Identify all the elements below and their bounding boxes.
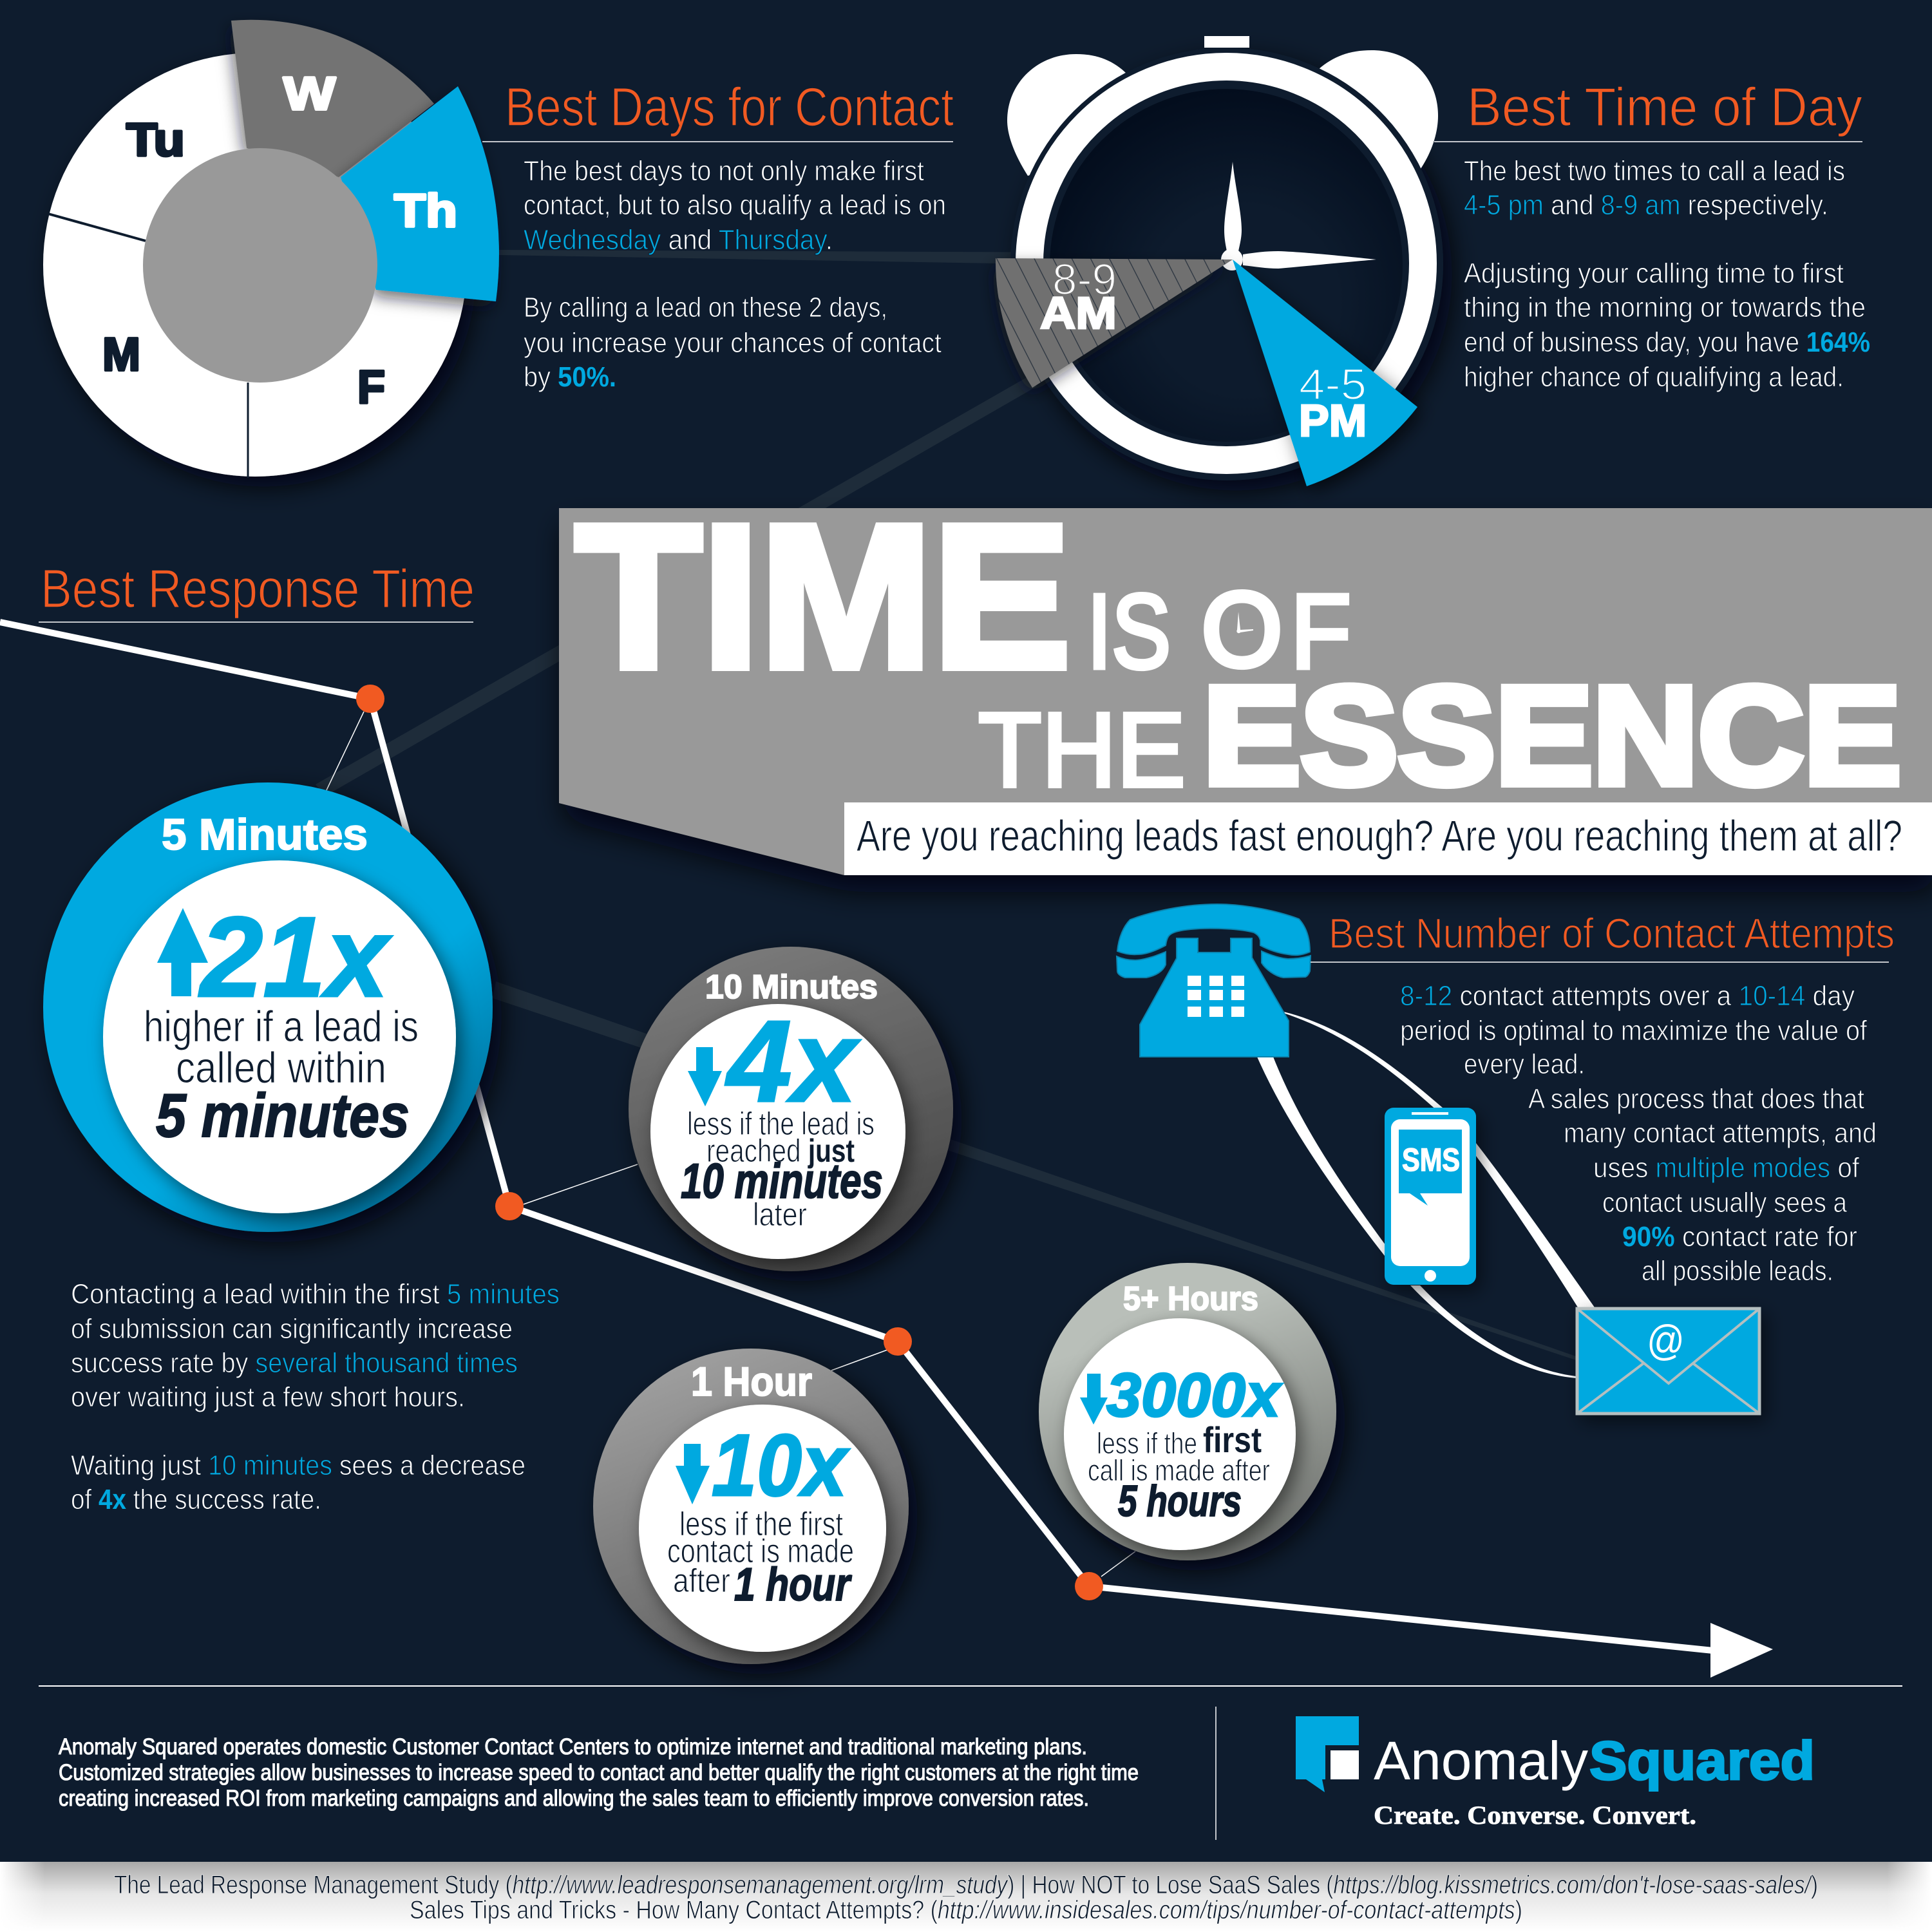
caption xyxy=(667,1506,854,1611)
icon: email envelope xyxy=(1577,1309,1759,1414)
wedge: Wednesday xyxy=(231,20,434,177)
text: response time body: of 4x the success rate. xyxy=(71,1484,321,1515)
stat: 3000x: 3000x xyxy=(1106,1361,1283,1430)
caption xyxy=(681,1106,883,1233)
PM label xyxy=(1299,360,1367,446)
stat: 21x: 21x xyxy=(198,893,392,1021)
clock hands xyxy=(1221,162,1376,270)
text: best time body: Adjusting your calling time to first xyxy=(1464,258,1844,289)
label: 1 Hour: 1 Hour xyxy=(691,1359,812,1405)
heading: best time of day: Best Time of Day xyxy=(1467,77,1862,137)
caption: higher if a lead is xyxy=(144,1002,419,1051)
caption: 5 minutes xyxy=(156,1081,410,1150)
caption: 5 hours xyxy=(1118,1477,1242,1526)
heading: best response time: Best Response Time xyxy=(41,558,475,619)
heading: best days for contact: Best Days for Contact xyxy=(505,77,954,137)
text: best days body: contact, but to also qualify a lead is on xyxy=(524,189,946,221)
sources text: The Lead Response Management Study (http://www.leadresponsemanagement.org/lrm_study) | How NOT to Lose SaaS Sales (https://blog.kissmetrics.com/don't-lose-saas-sales/) xyxy=(114,1871,1818,1899)
sources text xyxy=(114,1871,1818,1924)
caption: less if the first xyxy=(679,1506,843,1543)
label: 5+ Hours: 5+ Hours xyxy=(1123,1280,1258,1318)
day labels: Tu xyxy=(126,115,185,166)
logo tagline: Create. Converse. Convert. xyxy=(1374,1801,1696,1830)
connector thin lines xyxy=(327,712,1135,1577)
logo: Anomaly Squared xyxy=(1296,1716,1815,1830)
wedge: Thursday xyxy=(341,86,499,301)
icon: right bell xyxy=(1288,50,1438,169)
text: best time body xyxy=(1464,155,1870,393)
caption xyxy=(144,1002,419,1150)
text: contact attempts body: uses multiple modes of xyxy=(1593,1152,1860,1184)
icon: up arrow xyxy=(157,908,208,996)
caption: 1 hour xyxy=(734,1559,852,1611)
caption: reached just xyxy=(706,1133,855,1169)
caption: first xyxy=(1203,1419,1262,1460)
title: IS OF: O xyxy=(1202,571,1282,688)
text: contact attempts body: every lead. xyxy=(1464,1048,1585,1080)
text: best days body: By calling a lead on these 2 days, xyxy=(524,292,887,323)
text: contact attempts body: A sales process that does that xyxy=(1528,1083,1864,1115)
text: best time body: end of business day, you have 164% xyxy=(1464,327,1870,358)
caption: call is made after xyxy=(1088,1454,1270,1487)
icon: clock top button xyxy=(1204,36,1249,48)
title: TIME: TIME xyxy=(575,482,1071,711)
PM label: PM xyxy=(1299,395,1367,446)
AM label: AM xyxy=(1040,288,1117,338)
subtitle strip xyxy=(844,802,1932,875)
text: company description: creating increased ROI from marketing campaigns and allowing the sales team to efficiently improve conversion rates. xyxy=(59,1786,1089,1811)
text: company description: Customized strategies allow businesses to increase speed to contact and better qualify the right customers at the right time xyxy=(59,1760,1139,1785)
icon: email envelope: @ xyxy=(1647,1316,1685,1364)
caption: contact is made xyxy=(667,1533,854,1570)
day labels xyxy=(102,68,457,413)
text: contact attempts body: contact usually sees a xyxy=(1602,1187,1847,1218)
icon: left bell xyxy=(1007,54,1159,176)
sources text: Sales Tips and Tricks - How Many Contact Attempts? (http://www.insidesales.com/tips/number-of-contact-attempts) xyxy=(410,1896,1522,1924)
text: contact attempts body: many contact attempts, and xyxy=(1564,1117,1877,1149)
caption: less if the lead is xyxy=(687,1106,875,1142)
title: IS OF: IS xyxy=(1087,573,1171,690)
logo: Anomaly Squared: Squared xyxy=(1589,1730,1815,1791)
title: THE: THE xyxy=(978,691,1186,809)
text: best days body: Wednesday and Thursday. xyxy=(524,224,833,256)
wedge: 8-9 AM xyxy=(996,258,1233,388)
text: company description: Anomaly Squared operates domestic Customer Contact Centers to optimize internet and traditional marketing plans. xyxy=(59,1734,1087,1759)
text: best days body: by 50%. xyxy=(524,361,616,393)
stat: 10x: 10x xyxy=(712,1416,850,1514)
panel: alarm clock xyxy=(996,36,1443,486)
footer band xyxy=(0,1862,1932,1932)
caption: after xyxy=(673,1562,730,1600)
text: best days body: The best days to not only make first xyxy=(524,155,924,187)
text: contact attempts body: period is optimal to maximize the value of xyxy=(1400,1015,1868,1046)
faint background connector lines xyxy=(316,250,1576,1360)
title: IS OF: F xyxy=(1291,573,1351,690)
circle: 1 hour xyxy=(593,1349,909,1664)
label: 5 Minutes: 5 Minutes xyxy=(162,810,368,859)
panel: best days pie chart xyxy=(43,20,499,478)
text: contact attempts body: all possible leads. xyxy=(1642,1255,1833,1287)
AM label xyxy=(1040,255,1117,338)
text: company description xyxy=(59,1734,1139,1811)
footer vertical divider xyxy=(1215,1707,1217,1840)
text: response time body: success rate by several thousand times xyxy=(71,1347,518,1379)
caption: 10 minutes xyxy=(681,1154,883,1209)
clock face xyxy=(1050,89,1403,442)
caption xyxy=(1088,1419,1270,1526)
icon: down arrow xyxy=(688,1047,722,1106)
day labels: F xyxy=(357,362,385,413)
day labels: Th xyxy=(394,185,457,237)
text: best time body: 4-5 pm and 8-9 am respectively. xyxy=(1464,189,1828,221)
label: 10 Minutes: 10 Minutes xyxy=(705,969,878,1006)
text: best days body xyxy=(524,155,946,393)
text: response time body: over waiting just a few short hours. xyxy=(71,1381,465,1413)
text: contact attempts body xyxy=(1400,980,1877,1287)
circle: 5 minutes xyxy=(43,782,493,1232)
text: best time body: higher chance of qualifying a lead. xyxy=(1464,361,1844,393)
caption: later xyxy=(753,1197,807,1233)
trend line with arrow xyxy=(0,622,1773,1678)
centre disc xyxy=(143,148,377,383)
day labels: M xyxy=(102,329,140,381)
curved connectors: phone, smartphone, email xyxy=(1257,1012,1595,1378)
icon: smartphone with SMS bubble: SMS xyxy=(1402,1142,1460,1178)
text: contact attempts body: 8-12 contact attempts over a 10-14 day xyxy=(1400,980,1855,1012)
text: best time body: thing in the morning or towards the xyxy=(1464,292,1866,323)
text: response time body: Contacting a lead within the first 5 minutes xyxy=(71,1278,560,1310)
text: best days body: you increase your chances of contact xyxy=(524,327,942,359)
caption: called within xyxy=(176,1043,386,1092)
icon: down arrow xyxy=(1080,1374,1108,1425)
icon: down arrow xyxy=(676,1444,710,1504)
orange timeline dots xyxy=(356,685,1103,1600)
logo: Anomaly Squared: Anomaly xyxy=(1374,1730,1588,1791)
title: ESSENCE: ESSENCE xyxy=(1203,658,1901,813)
circle: 5+ hours xyxy=(1039,1263,1336,1560)
stat: 4x: 4x xyxy=(725,997,861,1126)
circle: 10 minutes xyxy=(629,947,953,1271)
icon: telephone keypad xyxy=(1188,976,1244,1017)
text: contact attempts body: 90% contact rate for xyxy=(1622,1221,1857,1253)
PM label: 4-5 xyxy=(1299,360,1367,409)
text: best time body: The best two times to call a lead is xyxy=(1464,155,1845,187)
icon: smartphone with SMS bubble xyxy=(1385,1108,1476,1285)
clock ring xyxy=(1029,67,1423,460)
text: response time body: Waiting just 10 minutes sees a decrease xyxy=(71,1450,526,1481)
icon: telephone xyxy=(1117,904,1311,1057)
title: IS OF xyxy=(1087,571,1351,690)
caption: less if the xyxy=(1097,1426,1197,1460)
title banner xyxy=(559,482,1932,875)
day labels: W xyxy=(283,68,336,120)
text: response time body xyxy=(71,1278,560,1515)
wedge: 4-5 PM xyxy=(1233,260,1417,486)
AM label: 8-9 xyxy=(1052,255,1117,304)
text: response time body: of submission can significantly increase xyxy=(71,1313,513,1345)
footer divider xyxy=(39,1685,1902,1687)
